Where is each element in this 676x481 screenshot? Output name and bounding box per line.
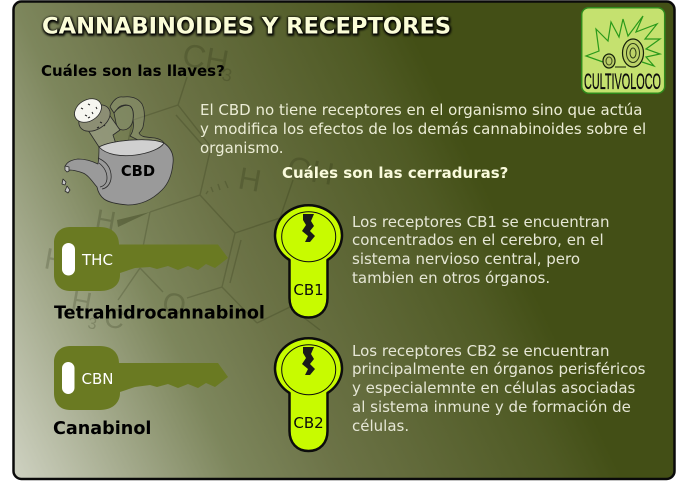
- text block: CB1 description: concentrados en el cerebro, en el: [352, 231, 604, 249]
- text block: CB2 description: principalmente en órganos perisféricos: [352, 360, 646, 378]
- molecule watermark: H: [236, 160, 264, 199]
- icon: CB1 lock: CB1: [293, 281, 324, 299]
- molecule watermark: OH: [285, 149, 337, 192]
- text block: CB1 description: sistema nervioso central, pero: [352, 250, 580, 268]
- molecule watermark: H: [69, 284, 94, 318]
- molecule watermark: C: [102, 301, 127, 335]
- icon: CB2 lock: CB2: [293, 414, 324, 432]
- title: CANNABINOIDES Y RECEPTORES: [42, 14, 451, 40]
- text block: CB2 description: y especialemnte en células asociadas: [352, 379, 636, 397]
- text block: CBD description: El CBD no tiene receptores en el organismo sino que actúa: [200, 101, 642, 119]
- text block: CB1 description: Los receptores CB1 se encuentran: [352, 213, 609, 231]
- label: Canabinol: Canabinol: [53, 419, 151, 439]
- molecule watermark: 3: [220, 64, 234, 86]
- icon: CBN key: [54, 346, 228, 410]
- text block: CB2 description: células.: [352, 417, 409, 435]
- text block: CB2 description: al sistema inmune y de formación de: [352, 398, 631, 416]
- text block: CB1 description: tambien en otros órganos.: [352, 269, 550, 287]
- molecule watermark: CH: [180, 36, 232, 80]
- molecule watermark: H: [42, 242, 69, 279]
- icon: CB2 lock: [275, 338, 342, 451]
- icon: CBD jug: CBD: [121, 163, 155, 180]
- molecule watermark: H: [93, 203, 118, 237]
- icon: CBD jug: [62, 94, 173, 205]
- icon: THC key: THC: [81, 251, 113, 269]
- molecule watermark: [42, 36, 337, 335]
- text block: CB2 description: Los receptores CB2 se encuentran: [352, 342, 609, 360]
- heading: llaves: Cuáles son las llaves?: [41, 62, 225, 80]
- text block: CBD description: organismo.: [200, 139, 284, 157]
- icon: cultivoloco logo: [582, 8, 665, 94]
- molecule watermark: O: [160, 286, 189, 323]
- icon: CB1 lock: [275, 205, 342, 318]
- icon: CBN key: CBN: [82, 370, 114, 388]
- heading: cerraduras: Cuáles son las cerraduras?: [282, 164, 508, 182]
- text block: CBD description: y modifica los efectos de los demás cannabinoides sobre el: [200, 120, 646, 138]
- title: CANNABINOIDES Y RECEPTORES: [42, 14, 452, 40]
- icon: THC key: [54, 227, 228, 291]
- molecule watermark: 3: [86, 315, 98, 334]
- label: Tetrahidrocannabinol: Tetrahidrocannabinol: [54, 304, 265, 324]
